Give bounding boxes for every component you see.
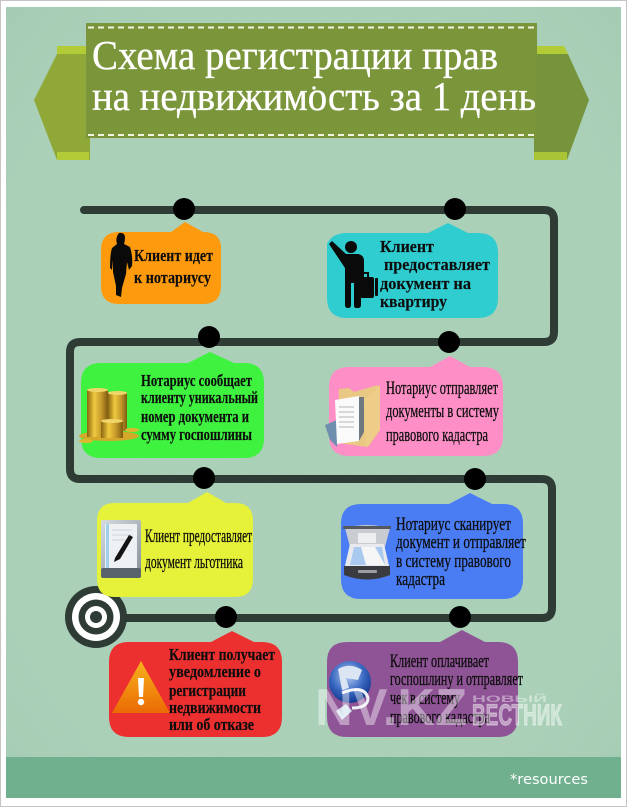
step text: Клиент: [380, 237, 435, 256]
step text: Нотариус сканирует: [396, 514, 511, 535]
step text: или об отказе: [169, 715, 254, 734]
step text: Клиент идет: [134, 246, 214, 265]
step: client provides benefit document: [97, 492, 253, 597]
step: client provides apartment document: [327, 223, 498, 318]
watermark: NV.KZ news logo: [315, 679, 562, 737]
step text: документы в систему: [386, 401, 499, 422]
step text: к нотариусу: [134, 268, 211, 287]
step text: Нотариус сообщает: [141, 371, 252, 390]
step text: [390, 651, 523, 728]
step text: [396, 514, 526, 590]
title text: Схема регистрации прав: [92, 32, 498, 78]
step text: [169, 645, 276, 734]
step: client pays state fee: [327, 630, 523, 737]
icon: document and pen: [101, 520, 141, 578]
teal bubble: [327, 223, 498, 318]
red bubble: [109, 631, 282, 737]
step text: кадастра: [396, 569, 445, 590]
step: notary reports number and fee: [79, 352, 264, 458]
step text: квартиру: [380, 292, 447, 311]
step text: правового кадастра: [386, 425, 488, 446]
step text: предоставляет: [384, 255, 491, 274]
step text: госпошлину и отправляет: [390, 669, 523, 690]
step text: Клиент оплачивает: [390, 651, 489, 672]
process path line: [70, 210, 554, 618]
step text: [134, 246, 214, 287]
title banner: [34, 23, 589, 160]
step text: Нотариус отправляет: [386, 378, 498, 399]
icon: scanner: [343, 525, 391, 580]
banner right fold: [534, 46, 589, 160]
title text: [92, 32, 536, 119]
watermark: NV.KZ news logo: ВЕСТНИК: [472, 699, 562, 732]
step text: [141, 371, 258, 444]
banner left fold: [34, 46, 90, 160]
watermark: NV.KZ news logo: НОВЫЙ: [472, 693, 547, 704]
step: client receives notification: [109, 631, 282, 737]
step text: уведомление о: [169, 662, 261, 681]
step text: номер документа и: [141, 407, 249, 426]
icon: globe with network cable: [329, 661, 371, 720]
purple bubble: [327, 630, 518, 737]
icon: coin stacks: [79, 388, 139, 443]
step text: [380, 237, 491, 311]
step text: правового кадастра: [390, 707, 490, 728]
banner main panel: [86, 23, 537, 138]
step text: сумму госпошлины: [141, 425, 252, 444]
green bubble: [81, 352, 264, 458]
path step dots: [173, 198, 486, 628]
step text: документ льготника: [145, 552, 243, 573]
step: client goes to notary: [101, 222, 221, 304]
step text: недвижимости: [169, 698, 261, 717]
step text: [145, 526, 252, 573]
icon: man with suitcase: [329, 241, 378, 308]
step: notary scans document: [341, 493, 526, 599]
footer text: resources: *resources: [510, 772, 588, 788]
step text: документ на: [380, 274, 471, 293]
step text: [386, 378, 499, 446]
step text: Клиент предоставляет: [145, 526, 252, 547]
step text: в систему правового: [396, 551, 511, 572]
step text: регистрации: [169, 681, 246, 700]
step text: клиенту уникальный: [141, 388, 258, 407]
yellow bubble: [97, 492, 253, 597]
step text: документ и отправляет: [396, 532, 526, 553]
icon: warning triangle: [112, 661, 170, 713]
icon: folder with papers: [325, 385, 380, 447]
footer band: [6, 757, 621, 798]
step text: чек в систему: [390, 688, 460, 709]
watermark: NV.KZ news logo: NV.KZ: [315, 679, 467, 737]
blue bubble: [341, 493, 523, 599]
pink bubble: [329, 356, 503, 456]
orange bubble: [101, 222, 221, 304]
step: notary sends documents to cadastre: [325, 356, 503, 456]
icon: walking man: [110, 233, 132, 297]
step text: Клиент получает: [169, 645, 276, 664]
target end marker: [65, 586, 127, 648]
title text: на недвижимость за 1 день: [92, 73, 536, 119]
